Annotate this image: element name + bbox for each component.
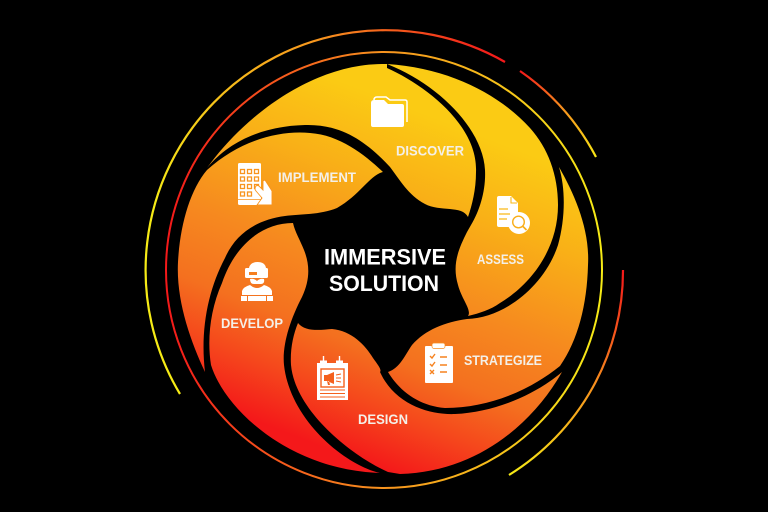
title: immersive solution [324, 244, 446, 296]
title: immersive solution: SOLUTION [329, 271, 439, 296]
petal: implement [178, 132, 383, 372]
petal: develop [209, 223, 380, 473]
petal: strategize [388, 167, 588, 408]
arc: outer lower right [509, 270, 623, 475]
icon: person with VR headset [241, 262, 273, 301]
swirl petals [178, 64, 588, 474]
petal: discover [207, 64, 476, 217]
icon: document with magnifier [497, 196, 530, 234]
icon: poster with megaphone [317, 356, 348, 400]
inner ring [166, 52, 602, 488]
petal: design [291, 323, 562, 474]
icon: folder [371, 97, 407, 127]
label: design: DESIGN [358, 412, 408, 427]
label: implement: IMPLEMENT [278, 170, 357, 185]
arc: outer long yellow to red [146, 30, 505, 394]
icon: tablet with hand [238, 163, 272, 205]
outer ring arcs [146, 30, 623, 475]
title: immersive solution: IMMERSIVE [324, 244, 446, 270]
step labels [221, 144, 542, 427]
label: discover: DISCOVER [396, 144, 464, 158]
label: strategize: STRATEGIZE [464, 353, 542, 368]
label: develop: DEVELOP [221, 316, 283, 331]
petal: assess [387, 64, 558, 316]
label: assess: ASSESS [477, 252, 524, 267]
icon: clipboard checklist [425, 343, 453, 383]
arc: outer short top right [520, 71, 596, 157]
